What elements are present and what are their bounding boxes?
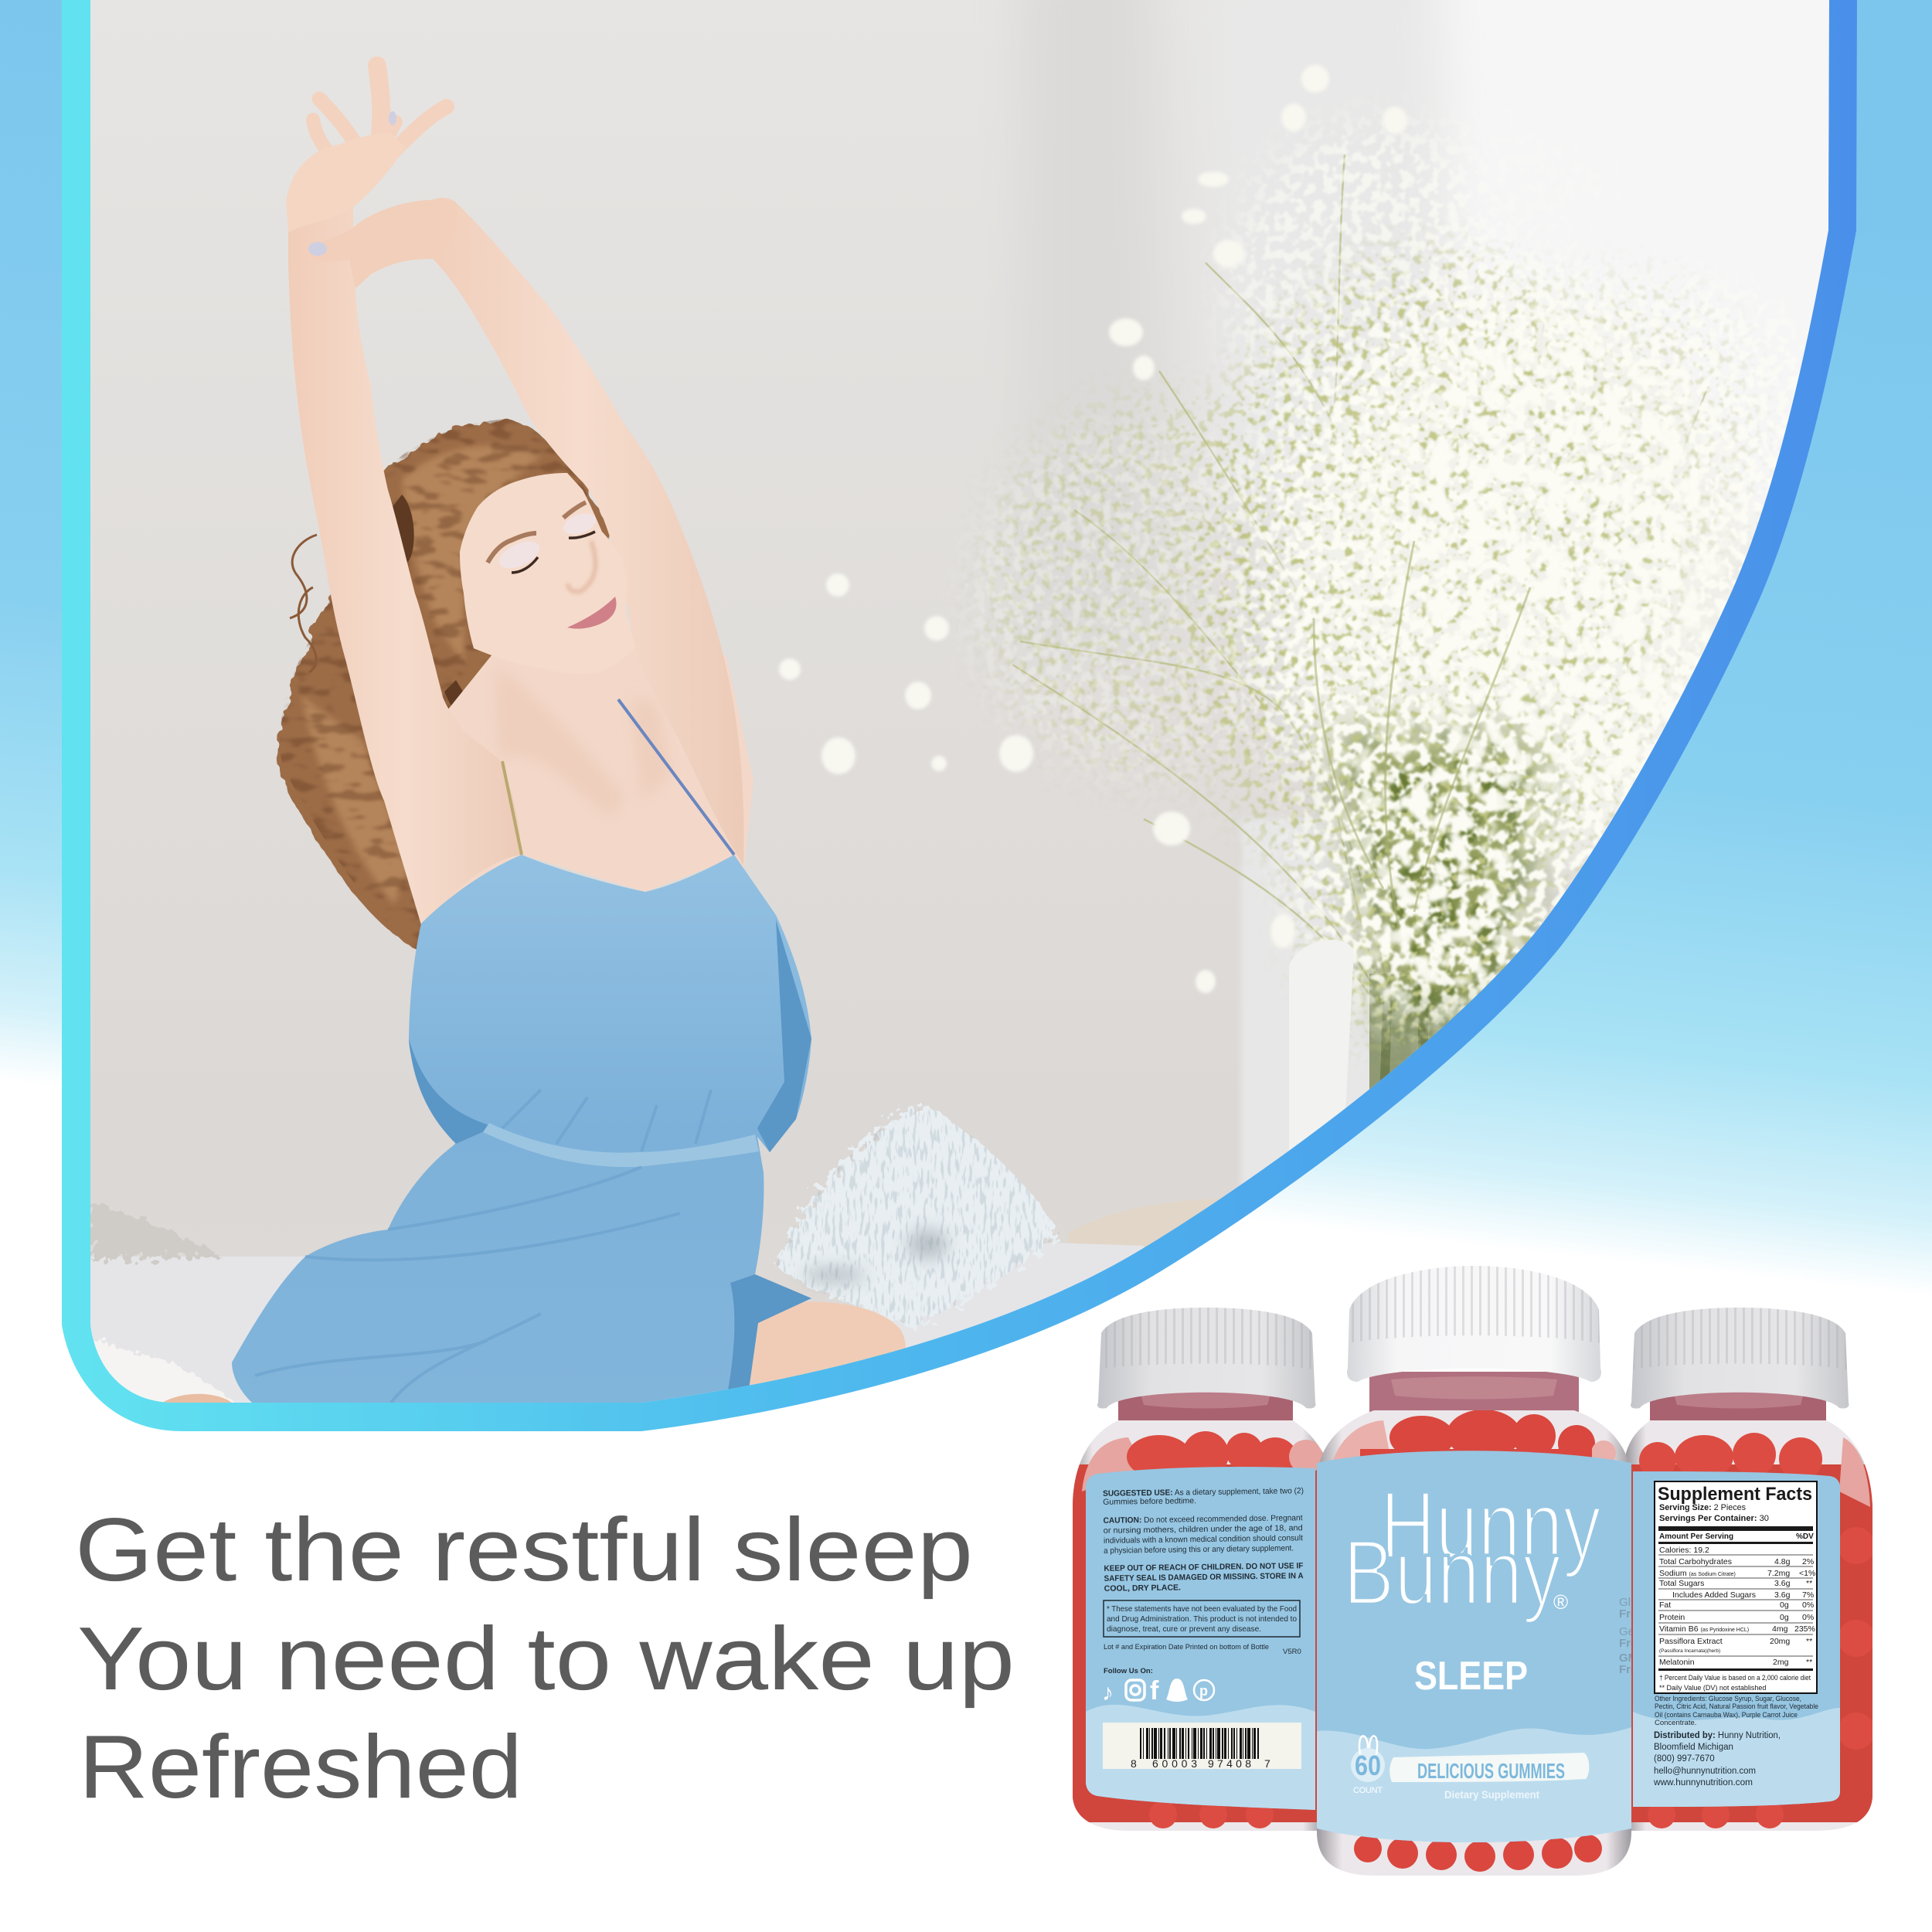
left bottle directions text: individuals with a known medical condition should consult: [1104, 1533, 1303, 1546]
count badge: 60: [1355, 1750, 1381, 1781]
count badge: [1351, 1736, 1385, 1795]
left bottle disclaimer box: diagnose, treat, cure or prevent any disease.: [1107, 1624, 1261, 1634]
left bottle cap: [1097, 1308, 1315, 1409]
supplement facts panel: 7.2mg: [1767, 1569, 1790, 1578]
supplement facts panel: **: [1806, 1579, 1812, 1588]
glass vase: [1369, 974, 1468, 1109]
left bottle lot text: Lot # and Expiration Date Printed on bottom of Bottle: [1104, 1643, 1269, 1651]
left bottle gummies: [1082, 1431, 1323, 1828]
left bottle directions text: [1103, 1486, 1305, 1594]
social icons: f: [1150, 1676, 1159, 1706]
count badge: COUNT: [1353, 1786, 1383, 1795]
heading: tagline: You need to wake up: [77, 1608, 1015, 1709]
centre bottle wave: [1317, 1727, 1631, 1842]
bedding: [77, 1243, 1159, 1414]
right bottle ingredients and distributor: Concentrate.: [1655, 1719, 1696, 1727]
supplement facts panel: 0g: [1780, 1613, 1789, 1622]
left bottle disclaimer box: * These statements have not been evaluated by the Food: [1107, 1604, 1297, 1614]
supplement facts panel: Servings Per Container: 30: [1659, 1514, 1769, 1523]
lips: [567, 597, 617, 629]
hair strands: [263, 410, 611, 966]
eyelids: [495, 509, 599, 574]
bottle: left, directions label: [1073, 1308, 1323, 1832]
supplement facts panel: Includes Added Sugars: [1672, 1590, 1756, 1600]
left bottle disclaimer box: [1104, 1600, 1300, 1637]
supplement facts panel: Supplement Facts: [1658, 1484, 1812, 1505]
dietary supplement: Dietary Supplement: [1444, 1788, 1539, 1801]
supplement facts panel: Calories: 19.2: [1659, 1546, 1709, 1555]
flower cloud: white speckle: [734, 39, 1893, 1159]
social icons: [1102, 1676, 1214, 1706]
woman: hair behind: [263, 410, 611, 966]
brand logo: [1343, 1472, 1601, 1624]
supplement facts panel: 20mg: [1770, 1637, 1790, 1646]
left bottle lot text: V5R0: [1283, 1648, 1301, 1656]
left bottle lot text: Follow Us On:: [1104, 1667, 1153, 1675]
side claims from rear bottle: Gela: [1619, 1625, 1644, 1638]
heading: tagline: Refreshed: [79, 1716, 522, 1817]
wall: [77, 0, 1855, 1414]
pillow strands: [773, 1097, 1066, 1329]
left bottle directions text: SUGGESTED USE: As a dietary supplement, take two (2): [1103, 1486, 1304, 1498]
heading: tagline: [75, 1499, 1015, 1817]
woman: right arm: [417, 198, 744, 866]
hair curls: [290, 535, 317, 672]
supplement facts panel: 4mg: [1772, 1624, 1788, 1634]
supplement facts panel: ** Daily Value (DV) not established: [1659, 1684, 1766, 1692]
bottle: centre, front label: [1317, 1266, 1644, 1878]
supplement facts panel: 3.6g: [1774, 1579, 1791, 1588]
supplement facts panel: %DV: [1796, 1532, 1814, 1541]
right bottle ingredients and distributor: www.hunnynutrition.com: [1653, 1778, 1753, 1787]
supplement facts panel: Sodium (as Sodium Citrate): [1659, 1569, 1736, 1578]
centre bottle body: [1317, 1406, 1631, 1878]
dress: waist gather: [483, 1123, 759, 1167]
supplement facts panel: Fat: [1659, 1600, 1671, 1610]
woman: torso and neck skin: [402, 634, 753, 923]
supplement facts panel: (Passiflora Incarnata)(herb): [1659, 1648, 1720, 1654]
supplement facts panel: 0%: [1802, 1613, 1814, 1622]
supplement facts panel: 7%: [1802, 1590, 1814, 1600]
supplement facts panel: 2mg: [1773, 1658, 1789, 1667]
flower cloud: dense white clusters: [734, 39, 1893, 1159]
bottle: right, supplement facts label: [1626, 1308, 1875, 1832]
left bottle directions text: CAUTION: Do not exceed recommended dose. Pregnant: [1103, 1513, 1303, 1526]
supplement facts panel: Amount Per Serving: [1659, 1532, 1733, 1541]
right bottle ingredients and distributor: Pectin, Citric Acid, Natural Passion fruit flavor, Vegetable: [1655, 1702, 1818, 1711]
gummies banner: DELICIOUS GUMMIES: [1417, 1759, 1565, 1783]
supplement facts panel: Vitamin B6 (as Pyridoxine HCL): [1659, 1624, 1749, 1634]
white tube vase: [1283, 940, 1354, 1182]
right bottle ingredients and distributor: Other Ingredients: Glucose Syrup, Sugar, Glucose,: [1655, 1695, 1801, 1703]
right bottle gummies: [1639, 1433, 1875, 1828]
centre bottle label: [1317, 1451, 1631, 1842]
barcode: 60003: [1152, 1757, 1197, 1770]
gummies banner: [1389, 1753, 1589, 1783]
supplement facts panel: Total Sugars: [1659, 1579, 1704, 1588]
eyebrows: [488, 502, 586, 563]
supplement facts panel: 2%: [1802, 1557, 1814, 1566]
supplement facts panel: **: [1806, 1658, 1812, 1667]
knee: [749, 1301, 906, 1399]
right bottle body: [1626, 1418, 1875, 1832]
left bottle directions text: or nursing mothers, children under the age of 18, and: [1104, 1523, 1303, 1536]
hair shadow beside neck: [390, 495, 502, 773]
left bottle body: [1073, 1418, 1323, 1832]
closed eyes: [512, 532, 595, 573]
big blossoms near vase: [1198, 603, 1631, 1082]
right bottle ingredients and distributor: hello@hunnynutrition.com: [1654, 1767, 1756, 1776]
left bottle label: [1086, 1467, 1315, 1810]
brand logo: Bunny: [1343, 1521, 1561, 1624]
supplement facts panel: Passiflora Extract: [1659, 1637, 1723, 1646]
barcode: 7: [1264, 1757, 1270, 1770]
right bottle ingredients and distributor: Oil (contains Carnauba Wax), Purple Carrot Juice: [1655, 1711, 1798, 1719]
dark stems near vase: [1198, 603, 1631, 1082]
right bottle ingredients and distributor: [1653, 1695, 1818, 1787]
left bottle directions text: COOL, DRY PLACE.: [1104, 1583, 1181, 1594]
supplement facts panel: † Percent Daily Value is based on a 2,000 calorie diet: [1659, 1674, 1811, 1682]
supplement facts panel: [1655, 1481, 1817, 1693]
supplement facts panel: 3.6g: [1774, 1590, 1791, 1600]
woman: face: [460, 473, 635, 674]
barcode: 97408: [1208, 1757, 1251, 1770]
supplement facts panel: Total Carbohydrates: [1659, 1557, 1732, 1566]
supplement facts panel: **: [1806, 1637, 1812, 1646]
left bottle directions text: Gummies before bedtime.: [1103, 1496, 1196, 1507]
supplement facts panel: Protein: [1659, 1613, 1685, 1622]
left bottle disclaimer box: and Drug Administration. This product is not intended to: [1107, 1614, 1297, 1624]
left bottle wave: [1086, 1705, 1315, 1810]
side claims from rear bottle: [1619, 1596, 1644, 1676]
dress: folds: [255, 1090, 711, 1403]
right bottle label: [1633, 1471, 1840, 1807]
left bottle directions text: SAFETY SEAL IS DAMAGED OR MISSING. STORE IN A: [1104, 1571, 1304, 1583]
darker wall shadow at curtain edge: [1036, 0, 1136, 337]
fluffy blanket left: [90, 1202, 222, 1260]
stems over blossoms: [1314, 541, 1530, 927]
side claims from rear bottle: Fre: [1619, 1663, 1637, 1676]
right bottle wave: [1633, 1708, 1840, 1807]
right bottle neck: [1650, 1382, 1826, 1422]
barcode: 8: [1131, 1757, 1137, 1770]
beige headboard: [1068, 1199, 1220, 1247]
left bottle directions text: a physician before using this or any dietary supplement.: [1104, 1543, 1294, 1556]
right bottle cap: [1631, 1308, 1849, 1409]
bright curtain behind flowers: [1439, 0, 1829, 546]
side claims from rear bottle: Fre: [1619, 1637, 1637, 1650]
supplement facts panel: 4.8g: [1774, 1557, 1791, 1566]
registered mark: ®: [1553, 1590, 1568, 1614]
panel: photo of woman stretching: [77, 0, 1893, 1414]
centre bottle gummies: [1333, 1410, 1616, 1872]
side claims from rear bottle: Fre: [1619, 1607, 1637, 1621]
centre bottle cap: [1347, 1266, 1601, 1382]
right bottle ingredients and distributor: Distributed by: Hunny Nutrition,: [1654, 1731, 1781, 1740]
supplement facts panel: 0%: [1802, 1600, 1814, 1610]
supplement facts panel: Serving Size: 2 Pieces: [1659, 1503, 1746, 1512]
supplement facts panel: Melatonin: [1659, 1658, 1695, 1667]
curtain strip: [1241, 819, 1372, 1206]
supplement facts panel: <1%: [1799, 1569, 1815, 1578]
right bottle ingredients and distributor: Bloomfield Michigan: [1654, 1743, 1733, 1752]
isolated blurred blossoms: [779, 65, 1407, 993]
flower stems: [1012, 155, 1708, 1005]
flower haze: [1283, 301, 1747, 873]
heading: tagline: Get the restful sleep: [75, 1499, 973, 1600]
pillow shadows: [804, 1229, 947, 1283]
woman: left arm: [288, 207, 522, 927]
fluffy pillow: [773, 1097, 1066, 1329]
frame: curved blue gradient band: [62, 0, 1857, 1431]
supplement facts panel: 235%: [1794, 1624, 1815, 1634]
supplement facts panel: 0g: [1780, 1600, 1789, 1610]
social icons: ♪: [1102, 1680, 1114, 1706]
left bottle lot text: [1104, 1643, 1301, 1675]
left bottle neck: [1118, 1382, 1293, 1422]
centre bottle neck: [1369, 1372, 1579, 1414]
woman: dress: [232, 855, 811, 1403]
fluffy throw bottom left: [90, 1341, 240, 1406]
woman: chest shadow: [495, 665, 672, 819]
grey curtain: [1222, 244, 1419, 495]
flower cloud: green speckle: [734, 39, 1893, 1159]
right bottle ingredients and distributor: (800) 997-7670: [1654, 1754, 1715, 1764]
product name: SLEEP: [1414, 1654, 1528, 1699]
social icons: p: [1199, 1683, 1208, 1699]
left bottle directions text: KEEP OUT OF REACH OF CHILDREN. DO NOT USE IF: [1104, 1561, 1304, 1573]
side claims from rear bottle: Glu: [1619, 1596, 1637, 1609]
hair highlights: [301, 446, 541, 904]
feet skin at bottom: [162, 1394, 618, 1403]
dress: fold shadows: [409, 920, 811, 1403]
side claims from rear bottle: GM: [1619, 1651, 1638, 1665]
woman: hands: [286, 66, 457, 288]
woman: straps: [502, 699, 734, 855]
brand logo: Hunny: [1380, 1472, 1601, 1579]
barcode: [1103, 1723, 1301, 1770]
nose shadow: [568, 541, 596, 592]
